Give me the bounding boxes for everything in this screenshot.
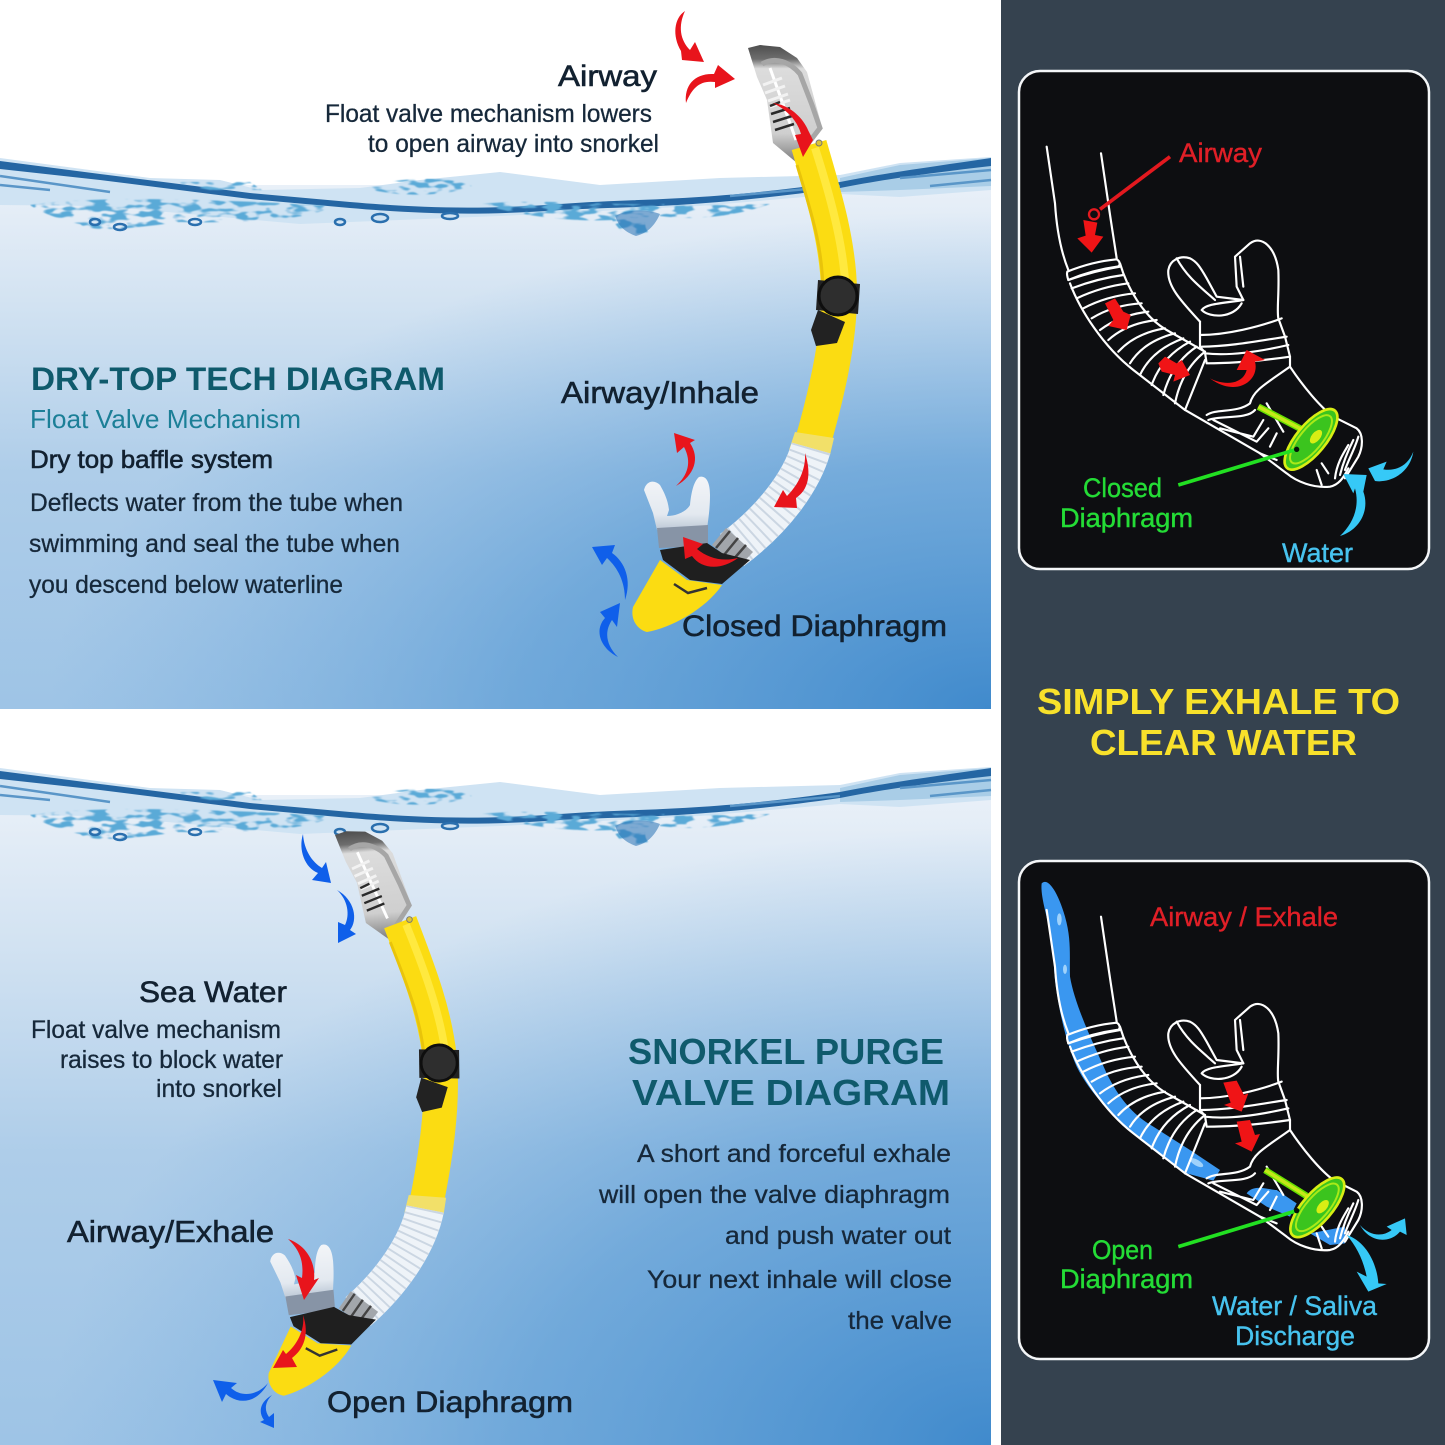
label: closed diaphragm: Diaphragm — [1060, 503, 1193, 533]
label: airway: Float valve mechanism lowers — [325, 100, 652, 128]
red airway arrows — [1077, 220, 1265, 387]
arrows: exhale path — [273, 1239, 319, 1368]
heading: simply exhale to clear water — [1037, 681, 1400, 763]
snorkel above the surface — [632, 45, 860, 632]
arrows: sea water at top — [301, 834, 356, 943]
label: open diaphragm — [1060, 1235, 1193, 1294]
panel: dry-top tech diagram — [0, 11, 991, 709]
heading: simply exhale to clear water: CLEAR WATER — [1090, 722, 1357, 763]
label: sea water: into snorkel — [156, 1075, 282, 1103]
label: open diaphragm: Open — [1092, 1235, 1153, 1265]
red exhale arrows — [1223, 1081, 1260, 1152]
snorkel line art with flow arrows — [1047, 147, 1413, 536]
label: open diaphragm: Open Diaphragm — [327, 1386, 573, 1419]
label: airway: to open airway into snorkel — [368, 130, 659, 158]
label: water: Water — [1282, 538, 1353, 568]
diaphragm — [1265, 1170, 1353, 1245]
label: sea water: Float valve mechanism — [31, 1016, 281, 1044]
card: open diaphragm exhale — [1019, 861, 1429, 1359]
label: water / saliva discharge: Discharge — [1235, 1321, 1355, 1351]
green pointer line — [1178, 447, 1299, 485]
label: sea water — [31, 976, 287, 1103]
label: closed diaphragm: Closed — [1083, 473, 1162, 503]
water background — [0, 185, 991, 709]
water background — [0, 795, 991, 1445]
snorkel below the surface — [225, 824, 486, 1397]
label: airway / exhale: Airway / Exhale — [1150, 902, 1338, 932]
text block: snorkel purge valve diagram — [598, 1031, 952, 1335]
water inside tube — [1041, 882, 1345, 1245]
panel: right column — [1001, 0, 1445, 1445]
text block: snorkel purge valve diagram: VALVE DIAGRAM — [632, 1072, 950, 1113]
label: open diaphragm: Diaphragm — [1060, 1264, 1193, 1294]
snorkel line art with water and flow arrows — [1041, 882, 1407, 1292]
text block: dry-top tech diagram: Float Valve Mechanism — [30, 404, 301, 434]
discharge arrows — [1347, 1218, 1407, 1292]
column background — [1001, 0, 1445, 1445]
label: water / saliva discharge — [1212, 1291, 1378, 1351]
text block: dry-top tech diagram: swimming and seal the tube when — [29, 530, 400, 558]
arrows: air in at top — [675, 11, 813, 157]
card frame — [1019, 861, 1429, 1359]
card frame — [1019, 71, 1429, 569]
panel: snorkel purge valve diagram — [0, 767, 991, 1445]
label: closed diaphragm: Closed Diaphragm — [682, 610, 947, 643]
label: airway/inhale: Airway/Inhale — [561, 375, 759, 410]
arrows: water pressure on closed diaphragm — [592, 545, 628, 657]
arrows: inhale path — [674, 433, 808, 567]
card: closed diaphragm inhale — [1019, 71, 1429, 569]
text block: dry-top tech diagram — [29, 361, 445, 599]
label: water / saliva discharge: Water / Saliva — [1212, 1291, 1378, 1321]
text block: snorkel purge valve diagram: the valve — [848, 1307, 952, 1335]
heading: simply exhale to clear water: SIMPLY EXHALE TO — [1037, 681, 1400, 722]
label: airway/exhale: Airway/Exhale — [67, 1214, 274, 1249]
text block: dry-top tech diagram: DRY-TOP TECH DIAGRAM — [31, 361, 445, 397]
arrows: water discharge — [213, 1380, 274, 1428]
text block: snorkel purge valve diagram: will open the valve diaphragm — [598, 1181, 950, 1209]
label: airway: Airway — [558, 60, 657, 93]
water arrows — [1340, 452, 1413, 536]
green pointer line — [1178, 1208, 1299, 1247]
text block: snorkel purge valve diagram: A short and forceful exhale — [637, 1140, 951, 1168]
red pointer line — [1089, 157, 1170, 219]
text block: dry-top tech diagram: Deflects water from the tube when — [30, 489, 403, 517]
label: sea water: Sea Water — [139, 976, 287, 1009]
text block: dry-top tech diagram: you descend below waterline — [29, 571, 343, 599]
water surface splash — [0, 157, 991, 236]
label: sea water: raises to block water — [60, 1046, 283, 1074]
text block: snorkel purge valve diagram: SNORKEL PURGE — [628, 1031, 944, 1072]
text block: dry-top tech diagram: Dry top baffle system — [30, 446, 273, 474]
text block: snorkel purge valve diagram: Your next inhale will close — [647, 1266, 952, 1294]
label: airway: Airway — [1179, 138, 1263, 168]
water surface splash — [0, 767, 991, 846]
label: closed diaphragm — [1060, 473, 1193, 533]
label: airway — [325, 60, 659, 158]
diaphragm — [1258, 401, 1346, 477]
text block: snorkel purge valve diagram: and push water out — [725, 1222, 951, 1250]
